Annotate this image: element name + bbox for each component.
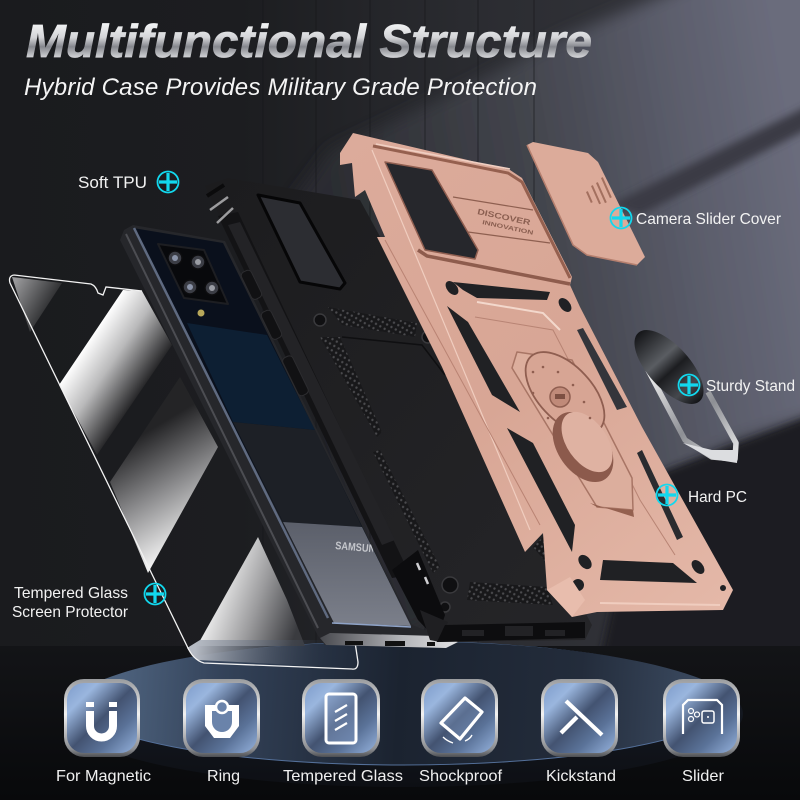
camera module (158, 244, 228, 316)
title: Multifunctional Structure (26, 15, 592, 67)
icon: kickstand (561, 701, 602, 735)
label: hard PC (656, 484, 747, 506)
case interior outline (342, 337, 445, 375)
label: soft TPU (78, 172, 178, 192)
camera window (385, 162, 478, 259)
feature: slider (663, 679, 740, 785)
hard PC rose-gold shell (340, 133, 733, 617)
feature: shockproof: Shockproof (419, 768, 503, 785)
feature: tempered glass (283, 679, 403, 785)
phone (120, 225, 458, 648)
floor (0, 646, 800, 800)
icon: tilted phone (441, 698, 482, 743)
label: camera slider cover (610, 208, 782, 228)
tempered glass screen protector (10, 275, 358, 669)
ring mount (511, 338, 634, 517)
embossed slider text: INNOVATION (482, 220, 534, 237)
label: tempered glass screen protector (12, 584, 166, 621)
label: tempered glass screen protector: Screen Protector (12, 604, 129, 621)
label: sturdy stand (678, 374, 795, 396)
feature: for magnetic (56, 679, 151, 785)
icon: ring (205, 701, 239, 738)
platform ellipse (63, 641, 743, 787)
label: tempered glass screen protector: Tempered Glass (14, 585, 128, 602)
samsung logo: SAMSUN (335, 540, 376, 555)
icon: glass panel (326, 694, 356, 743)
feature: kickstand: Kickstand (546, 768, 616, 785)
slider rails (372, 144, 570, 530)
soft TPU case (205, 178, 592, 642)
label: camera slider cover: Camera Slider Cover (636, 211, 782, 228)
feature: slider: Slider (682, 768, 725, 785)
feature: tempered glass: Tempered Glass (283, 768, 403, 785)
subtitle: Hybrid Case Provides Military Grade Protection (24, 74, 537, 101)
camera slider cover (527, 142, 645, 265)
feature: for magnetic: For Magnetic (56, 768, 151, 785)
label: hard PC: Hard PC (688, 489, 747, 506)
grip strips (320, 307, 563, 605)
feature: ring (183, 679, 260, 785)
icon: magnet (86, 702, 117, 738)
label: soft TPU: Soft TPU (78, 174, 147, 192)
embossed slider text: DISCOVER (477, 207, 532, 227)
icon: camera slider (683, 700, 722, 734)
marker (158, 172, 178, 192)
embossed slider text (477, 207, 534, 237)
feature: shockproof (419, 679, 503, 785)
frame highlights (475, 302, 720, 617)
feature: kickstand (541, 679, 618, 785)
phone bottom edge (320, 633, 458, 648)
top bumper (207, 185, 233, 223)
ring stand (623, 319, 738, 463)
frame cutouts (443, 279, 726, 591)
feature: ring: Ring (207, 768, 240, 785)
screws (314, 314, 458, 612)
side buttons (240, 269, 310, 397)
lower corner bumpers (392, 550, 585, 642)
label: sturdy stand: Sturdy Stand (706, 378, 795, 395)
